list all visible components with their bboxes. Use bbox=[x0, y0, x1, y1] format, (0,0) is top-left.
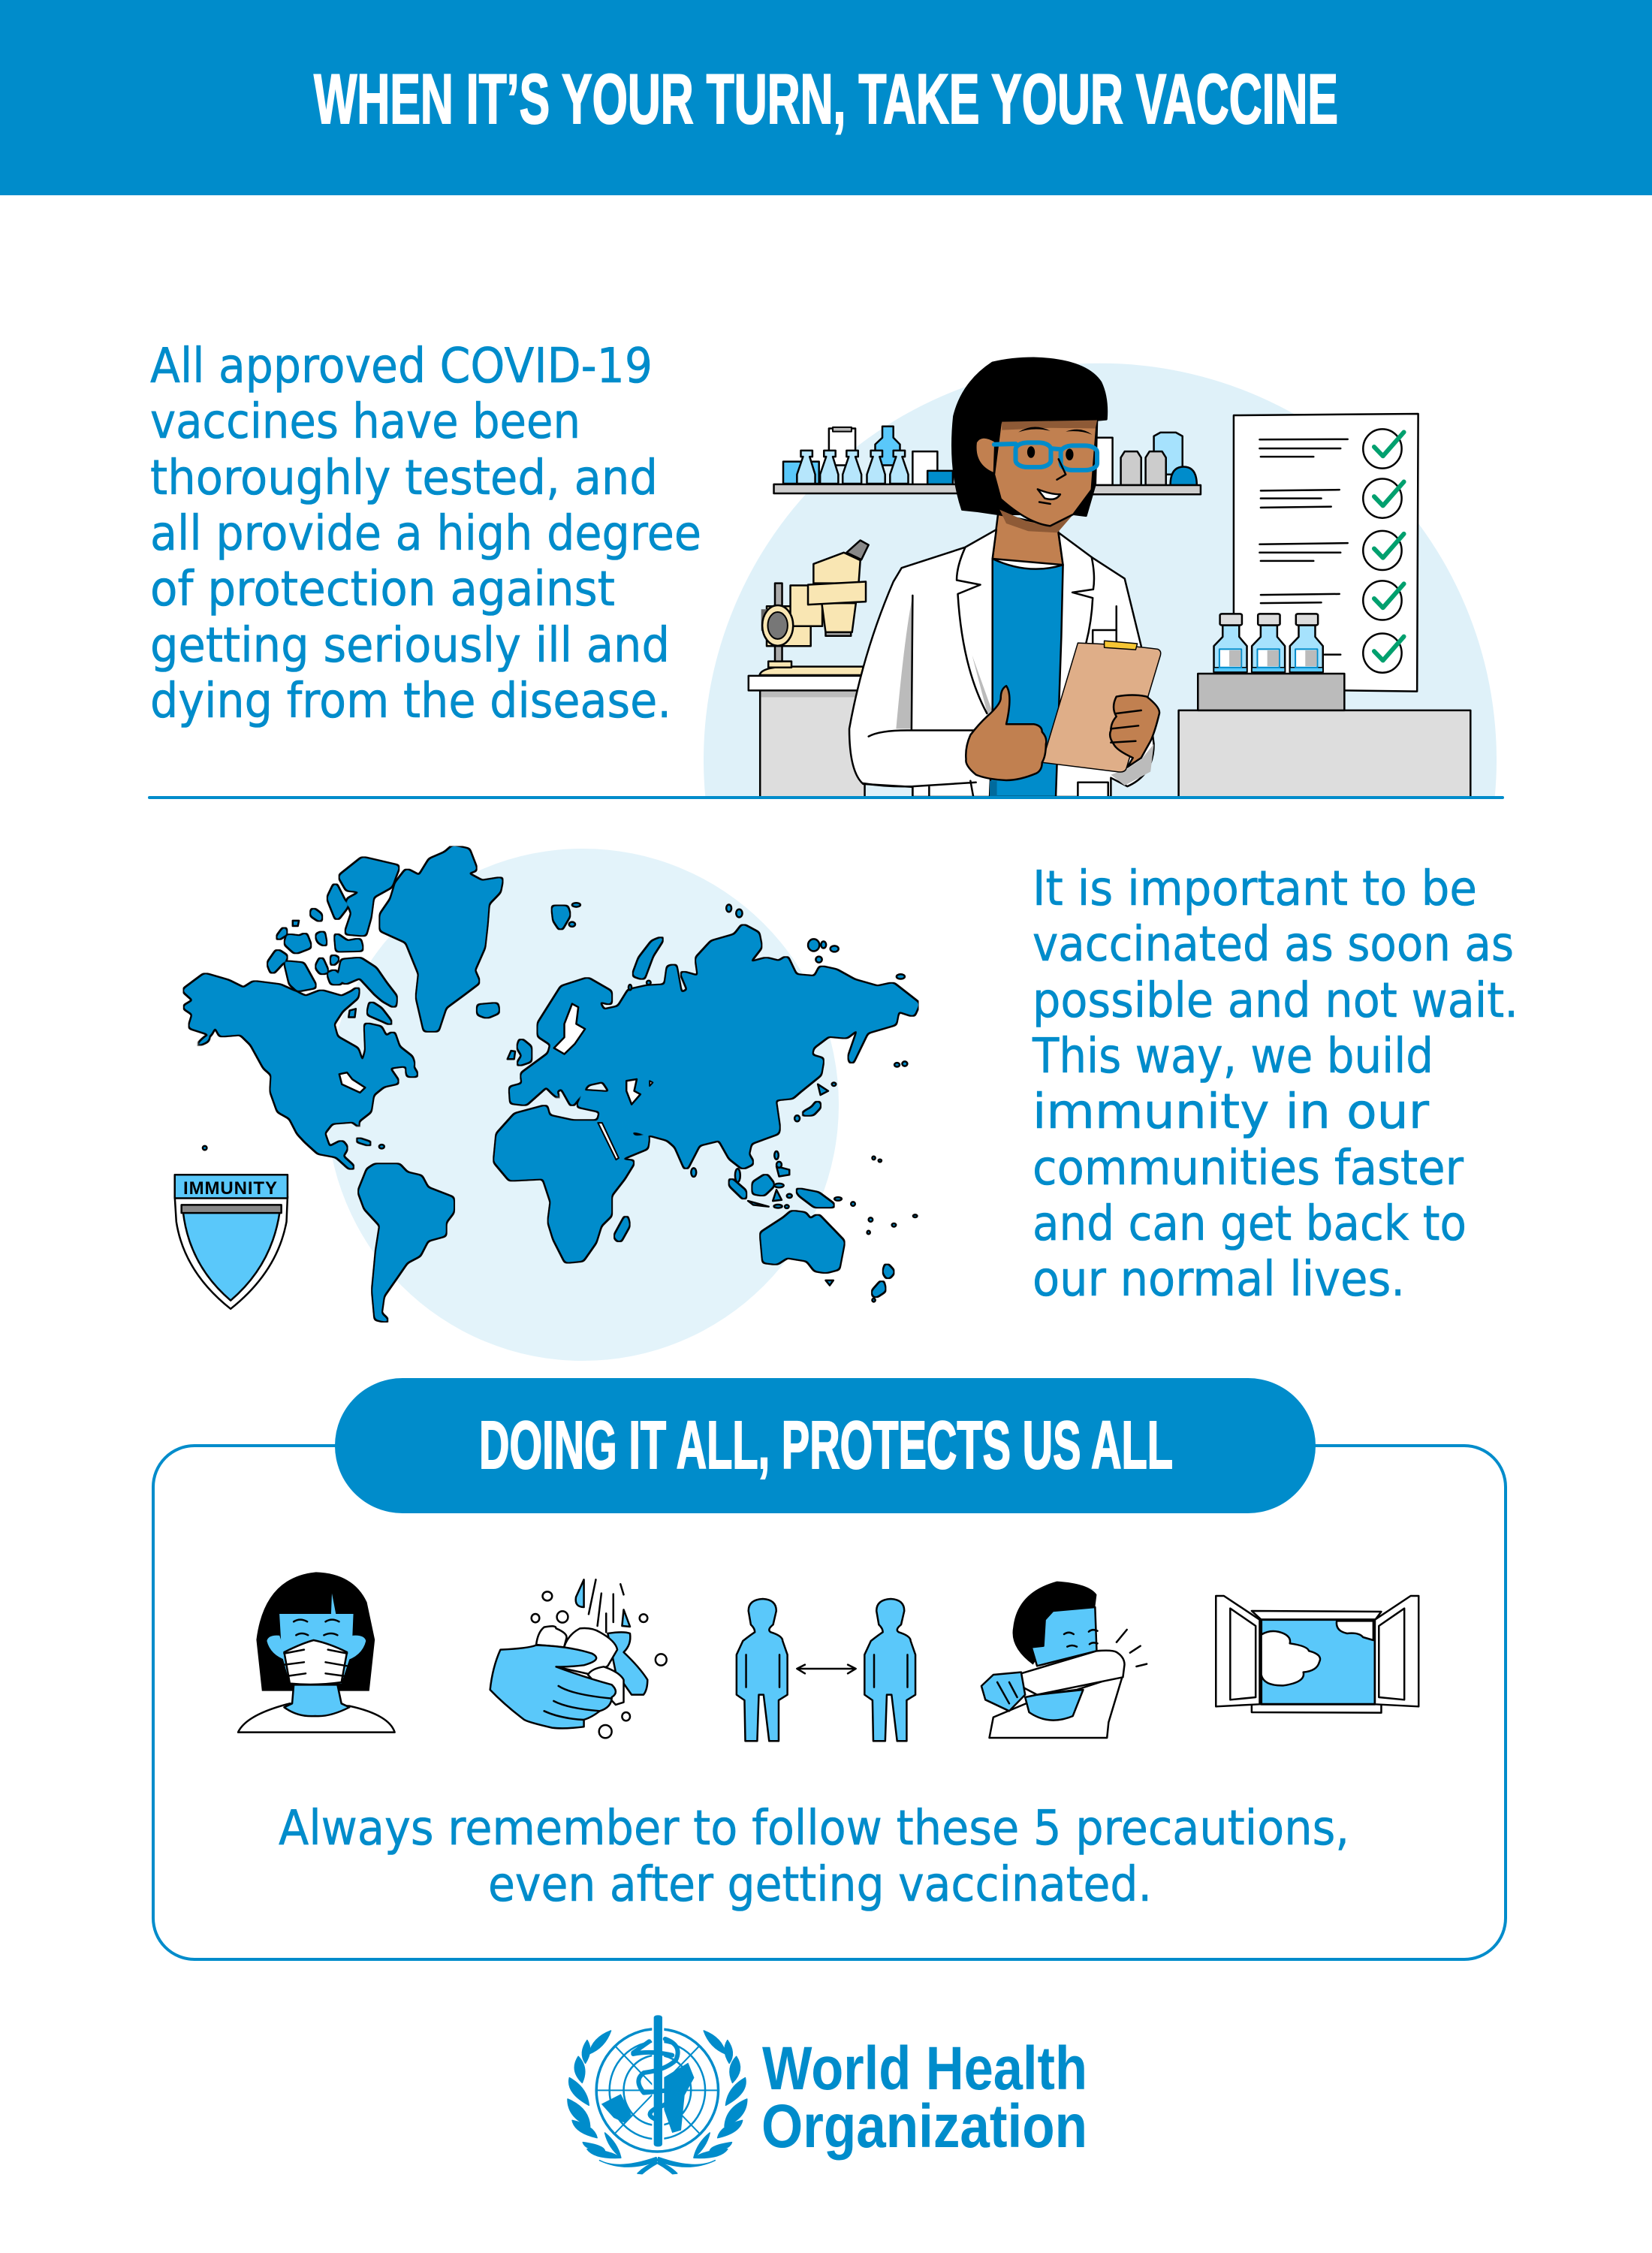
panel heading pill bbox=[335, 1378, 1316, 1513]
panel heading pill: DOING IT ALL, PROTECTS US ALL bbox=[479, 1408, 1173, 1483]
text block: vaccinate soon: communities faster bbox=[1032, 1141, 1464, 1196]
icon: wash hands bbox=[490, 1579, 667, 1738]
text block: vaccinate soon: immunity in our bbox=[1032, 1084, 1430, 1140]
shelf with bottles bbox=[774, 427, 1201, 494]
text block: approved vaccines: getting seriously ill and bbox=[150, 618, 670, 674]
text block: approved vaccines bbox=[150, 339, 701, 729]
divider line bbox=[149, 796, 1503, 799]
text block: approved vaccines: thoroughly tested, and bbox=[150, 451, 658, 506]
WHO logo bbox=[568, 2014, 1087, 2174]
icon: wear a mask bbox=[238, 1572, 395, 1733]
text block: vaccinate soon bbox=[1032, 861, 1518, 1307]
text block: approved vaccines: All approved COVID-19 bbox=[150, 339, 653, 394]
icon: keep distance bbox=[737, 1599, 915, 1741]
scientist bbox=[849, 358, 1161, 798]
text block: vaccinate soon: possible and not wait. bbox=[1032, 973, 1518, 1029]
wordmark bbox=[761, 2034, 1087, 2161]
text block: approved vaccines: of protection against bbox=[150, 562, 615, 617]
bench with vaccine vials bbox=[1179, 614, 1470, 798]
text block: approved vaccines: vaccines have been bbox=[150, 394, 580, 450]
panel: precautions bbox=[153, 1378, 1506, 1959]
wordmark: World Health bbox=[762, 2034, 1087, 2103]
panel caption: even after getting vaccinated. bbox=[488, 1857, 1152, 1913]
microscope and side table bbox=[749, 540, 869, 798]
text block: vaccinate soon: our normal lives. bbox=[1032, 1252, 1405, 1307]
text block: vaccinate soon: and can get back to bbox=[1032, 1196, 1467, 1252]
header banner bbox=[0, 0, 1652, 195]
text block: vaccinate soon: It is important to be bbox=[1032, 861, 1477, 917]
immunity shield bbox=[175, 1175, 288, 1309]
continents bbox=[183, 846, 919, 1323]
precaution icons bbox=[238, 1572, 1418, 1741]
illustration: world map with immunity shield bbox=[175, 846, 918, 1361]
text block: approved vaccines: all provide a high degree bbox=[150, 506, 701, 562]
illustration: scientist in laboratory bbox=[704, 358, 1497, 798]
text block: vaccinate soon: This way, we build bbox=[1032, 1029, 1433, 1084]
icon: open window bbox=[1216, 1596, 1418, 1713]
wordmark: Organization bbox=[761, 2092, 1087, 2161]
emblem bbox=[568, 2014, 747, 2174]
text block: vaccinate soon: vaccinated as soon as bbox=[1032, 917, 1514, 973]
checklist on the wall bbox=[1234, 414, 1418, 692]
icon: cough into elbow bbox=[981, 1582, 1147, 1738]
panel caption: Always remember to follow these 5 precautions, bbox=[279, 1801, 1349, 1856]
shield label: IMMUNITY bbox=[183, 1178, 277, 1199]
panel caption bbox=[279, 1801, 1349, 1913]
text block: approved vaccines: dying from the disease. bbox=[150, 674, 671, 729]
small islands bbox=[203, 903, 917, 1301]
